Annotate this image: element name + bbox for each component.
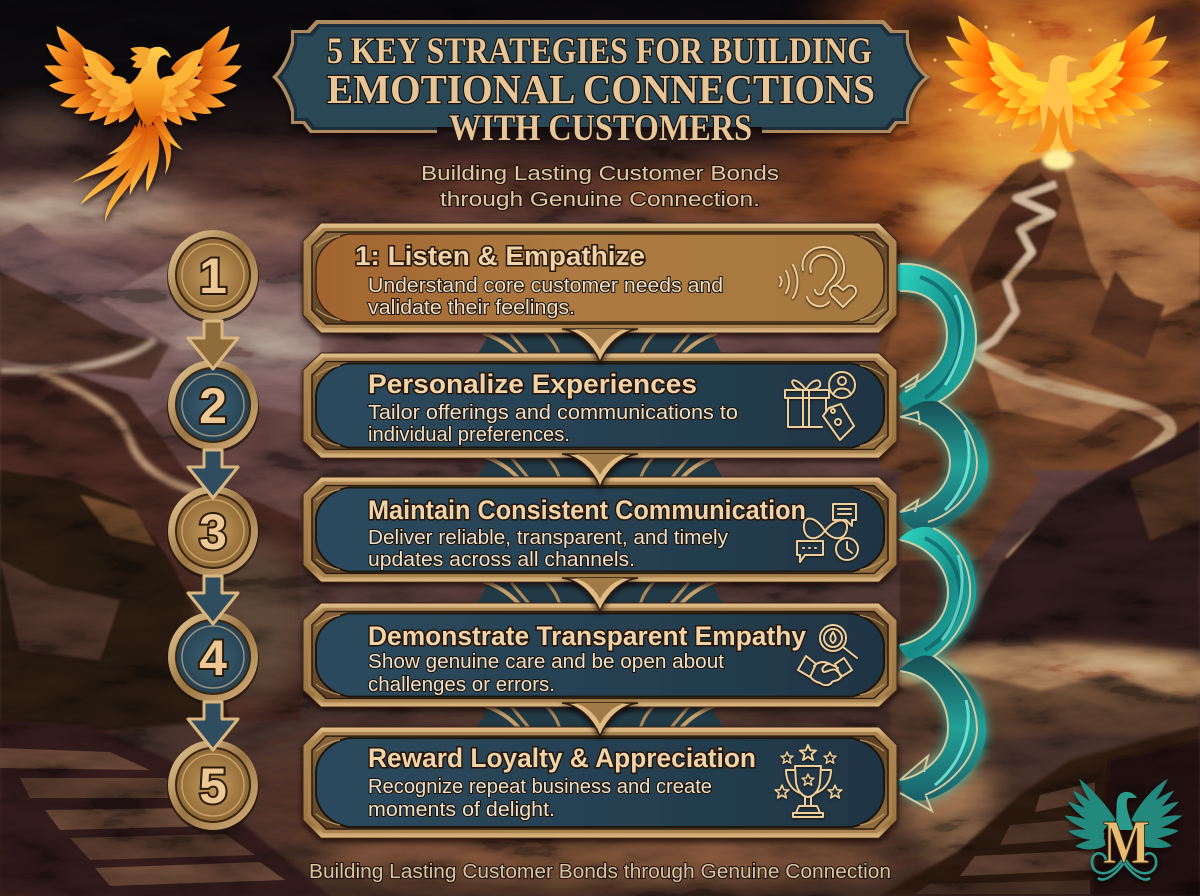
body text xyxy=(368,776,712,821)
body text xyxy=(368,527,728,571)
panel: card 3 maintain consistent communication xyxy=(303,477,897,582)
left stairs xyxy=(0,720,330,896)
panel: card 2 personalize experiences xyxy=(303,353,897,458)
medallion 1 xyxy=(167,230,259,323)
sparks xyxy=(934,21,1151,136)
body text xyxy=(368,402,738,446)
icon: teal phoenix M logo xyxy=(1063,775,1184,879)
icon: trophy and stars xyxy=(775,745,842,817)
heading line 3: WITH CUSTOMERS xyxy=(449,108,752,149)
arrow: card 3 to card 4 xyxy=(898,527,976,661)
body text: Tailor offerings and communications to xyxy=(368,402,738,424)
medallion 1: 1 xyxy=(199,248,227,304)
icon: infinity, chat and clock xyxy=(797,504,858,562)
body text: Understand core customer needs and xyxy=(368,275,723,297)
medallion 4 xyxy=(167,612,259,705)
body text: updates across all channels. xyxy=(368,549,635,571)
left mauve mountains xyxy=(0,223,320,480)
body text: individual preferences. xyxy=(368,424,570,446)
title banner xyxy=(272,20,930,149)
panel: card 5 reward loyalty and appreciation xyxy=(303,727,897,838)
panel: title plaque xyxy=(272,20,930,133)
body text: moments of delight. xyxy=(368,799,555,821)
heading: Demonstrate Transparent Empathy xyxy=(368,621,806,651)
medallion 2: 2 xyxy=(199,378,227,434)
left dark rocks xyxy=(0,470,230,740)
panel: card 4 demonstrate transparent empathy xyxy=(303,603,897,707)
medallion 5: 5 xyxy=(199,758,227,814)
arrow: card 4 to card 5 xyxy=(898,655,986,811)
heading line 1: 5 KEY STRATEGIES FOR BUILDING xyxy=(327,31,872,72)
icon: teal phoenix M logo: M xyxy=(1103,809,1150,877)
connector ribbons between cards xyxy=(476,333,724,729)
chevrons between cards xyxy=(562,329,638,736)
body text: Show genuine care and be open about xyxy=(368,651,724,673)
body text: challenges or errors. xyxy=(368,674,555,696)
footer tagline: Building Lasting Customer Bonds through Genuine Connection xyxy=(309,861,891,883)
arrow: card 1 to card 2 xyxy=(897,264,976,409)
body text: Deliver reliable, transparent, and timely xyxy=(368,527,728,549)
icon: left orange phoenix xyxy=(41,22,245,222)
heading: Maintain Consistent Communication xyxy=(368,495,806,525)
heading: Reward Loyalty & Appreciation xyxy=(368,743,756,773)
medallion 3 xyxy=(167,486,259,579)
heading: Personalize Experiences xyxy=(368,369,697,399)
heading line 2: EMOTIONAL CONNECTIONS xyxy=(327,66,875,112)
icon: magnifier and handshake xyxy=(798,625,857,685)
teal curved arrows xyxy=(897,264,988,811)
subtitle: Building Lasting Customer Bonds xyxy=(421,163,779,185)
right fire sky xyxy=(760,0,1200,350)
right volcano mountain xyxy=(880,150,1200,470)
icon: gift, person and tag xyxy=(785,372,855,440)
horizon glow xyxy=(890,644,1200,712)
medallion 2 xyxy=(167,360,259,453)
body text: validate their feelings. xyxy=(368,297,575,319)
panel: card 1 listen and empathize xyxy=(303,223,897,333)
medallion 3: 3 xyxy=(199,504,227,560)
medallion 5 xyxy=(167,740,259,833)
arrows between medallions xyxy=(188,321,238,750)
heading: 1: Listen & Empathize xyxy=(355,241,645,271)
right stairs xyxy=(880,725,1200,896)
arrow: card 2 to card 3 xyxy=(898,401,988,530)
subtitle: through Genuine Connection. xyxy=(440,189,760,211)
bottom band xyxy=(220,730,980,870)
subtitle xyxy=(421,163,779,211)
icon: right fiery phoenix over volcano xyxy=(934,11,1173,170)
body text xyxy=(368,651,724,696)
right dark rocks xyxy=(960,420,1200,650)
medallion 4: 4 xyxy=(199,630,227,686)
body text: Recognize repeat business and create xyxy=(368,776,712,798)
left clouds xyxy=(0,108,920,238)
icon: ear and heart xyxy=(780,247,856,307)
body text xyxy=(368,275,723,319)
